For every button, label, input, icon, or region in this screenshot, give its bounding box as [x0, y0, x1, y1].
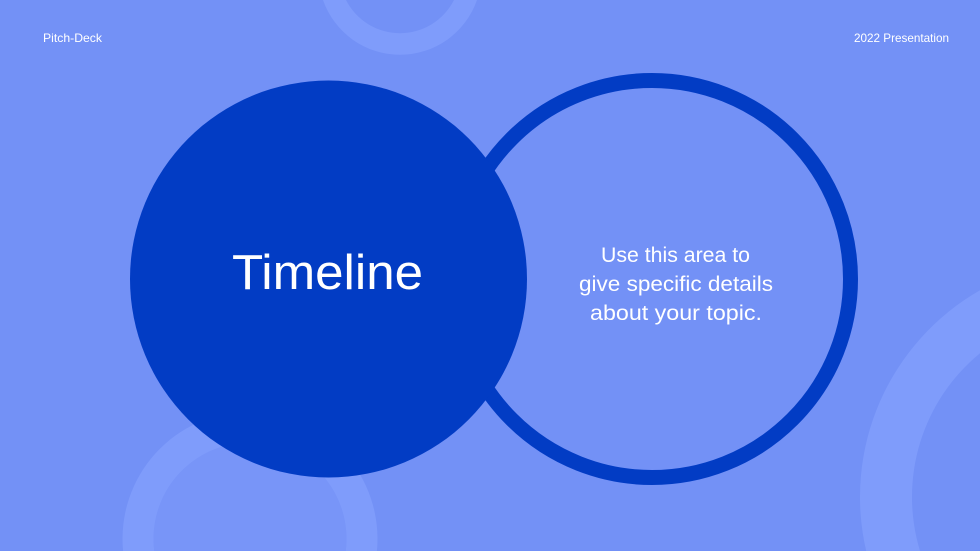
outlined circle — [454, 80, 850, 478]
description text: Use this area to — [601, 244, 750, 267]
decorative ring: bottom right — [860, 290, 980, 551]
description text — [579, 244, 773, 325]
description text: give specific details — [579, 273, 773, 296]
filled circle — [130, 80, 527, 478]
title: Timeline — [232, 246, 423, 300]
header label: left: Pitch-Deck — [43, 31, 103, 45]
decorative ring: bottom left — [122, 411, 377, 551]
header label: right: 2022 Presentation — [854, 31, 949, 45]
description text: about your topic. — [590, 302, 762, 325]
decorative ring: top — [323, 0, 477, 55]
